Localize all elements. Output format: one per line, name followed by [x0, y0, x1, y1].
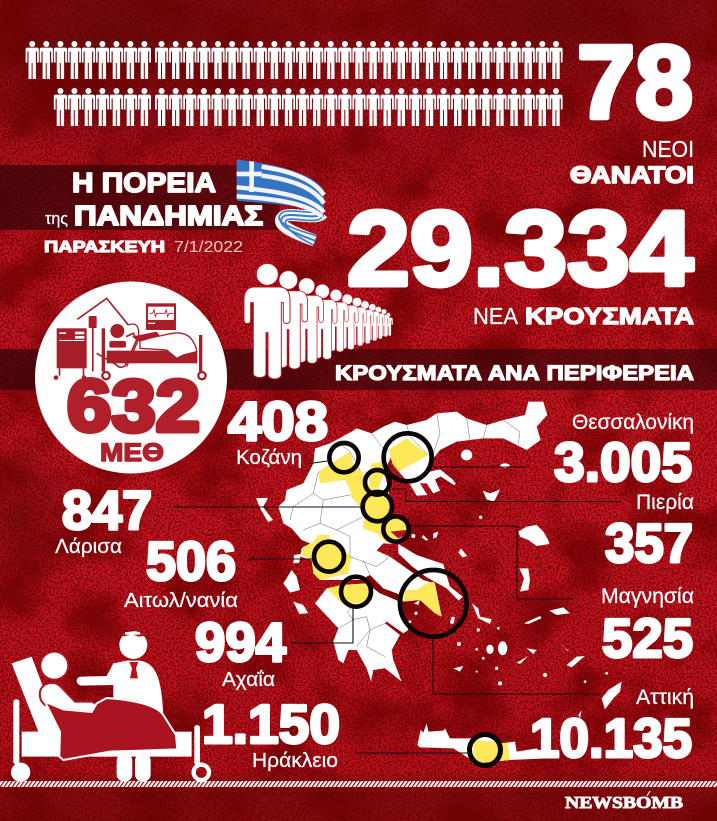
heading: cases by region: ΚΡΟΥΣΜΑΤΑ ΑΝΑ ΠΕΡΙΦΕΡΕΙΑ — [335, 362, 694, 385]
region borders — [290, 413, 520, 657]
region: Magnisia: 525 — [602, 607, 693, 669]
region: Achaia: 994 — [195, 611, 286, 673]
region: Aitoloakarnania — [124, 530, 238, 612]
ICU label: ΜΕΘ — [100, 439, 164, 467]
hatched footer divider — [0, 781, 717, 787]
ICU count: 632 — [67, 366, 200, 447]
stat: new deaths: ΝΕΟΙ — [642, 136, 694, 162]
icon: doctor and patient — [11, 631, 209, 782]
stat: new cases: ΝΕΑ — [473, 303, 519, 329]
stat: new cases: 29.334 — [347, 190, 693, 308]
region: Magnisia: Μαγνησία — [601, 585, 694, 608]
region: Aitoloakarnania: Αιτωλ/νανία — [124, 590, 238, 612]
region: Attica: Αττική — [636, 686, 694, 709]
banner: title strip — [0, 165, 280, 230]
panel: ICU badge — [35, 282, 227, 474]
stat: new deaths — [570, 25, 694, 189]
region: Kozani: 408 — [228, 390, 328, 452]
highlighted regions — [302, 438, 442, 617]
region: Aitoloakarnania: 506 — [146, 530, 236, 592]
map of Greece — [256, 402, 622, 766]
land — [278, 402, 570, 682]
icon: Greek flag ribbon — [237, 159, 324, 245]
region: Heraklion: Ηράκλειο — [252, 750, 338, 772]
region: Achaia: Αχαΐα — [222, 669, 275, 691]
region: Kozani: Κοζάνη — [236, 447, 302, 469]
title block — [44, 167, 263, 256]
region: Pieria: 357 — [605, 512, 693, 574]
icon: queue of people — [244, 263, 393, 379]
Crete — [417, 723, 547, 763]
highlight circles — [314, 433, 467, 637]
region: Thessaloniki: Θεσσαλονίκη — [572, 411, 694, 434]
icon row: deaths pictogram — [26, 41, 563, 126]
region: Larisa: Λάρισα — [55, 536, 122, 558]
title block: της — [45, 209, 68, 228]
icon: ICU bed — [54, 298, 206, 380]
stat: new deaths: ΘΑΝΑΤΟΙ — [570, 162, 694, 189]
title block: 7/1/2022 — [174, 239, 243, 256]
title block: ΠΑΝΔΗΜΙΑΣ — [74, 200, 263, 231]
badge disc — [35, 282, 227, 474]
leader lines — [173, 461, 620, 753]
region: Heraklion: 1.150 — [202, 693, 340, 755]
title block: Η ΠΟΡΕΙΑ — [72, 167, 216, 198]
stat: new cases: ΚΡΟΥΣΜΑΤΑ — [525, 303, 694, 329]
region: Thessaloniki: 3.005 — [554, 431, 692, 493]
land far islands — [417, 642, 622, 764]
highlight circle Heraklion — [470, 734, 500, 766]
region: Pieria: Πιερία — [636, 491, 694, 514]
banner: regional strip — [0, 349, 717, 390]
stat: new deaths: 78 — [577, 25, 693, 141]
region: Larisa: 847 — [62, 479, 152, 541]
region: Attica: 10.135 — [530, 707, 692, 769]
title block: ΠΑΡΑΣΚΕΥΗ — [44, 239, 165, 256]
land: Corfu — [256, 498, 273, 522]
logo: Newsbomb: NEWSBOMB — [565, 793, 683, 812]
